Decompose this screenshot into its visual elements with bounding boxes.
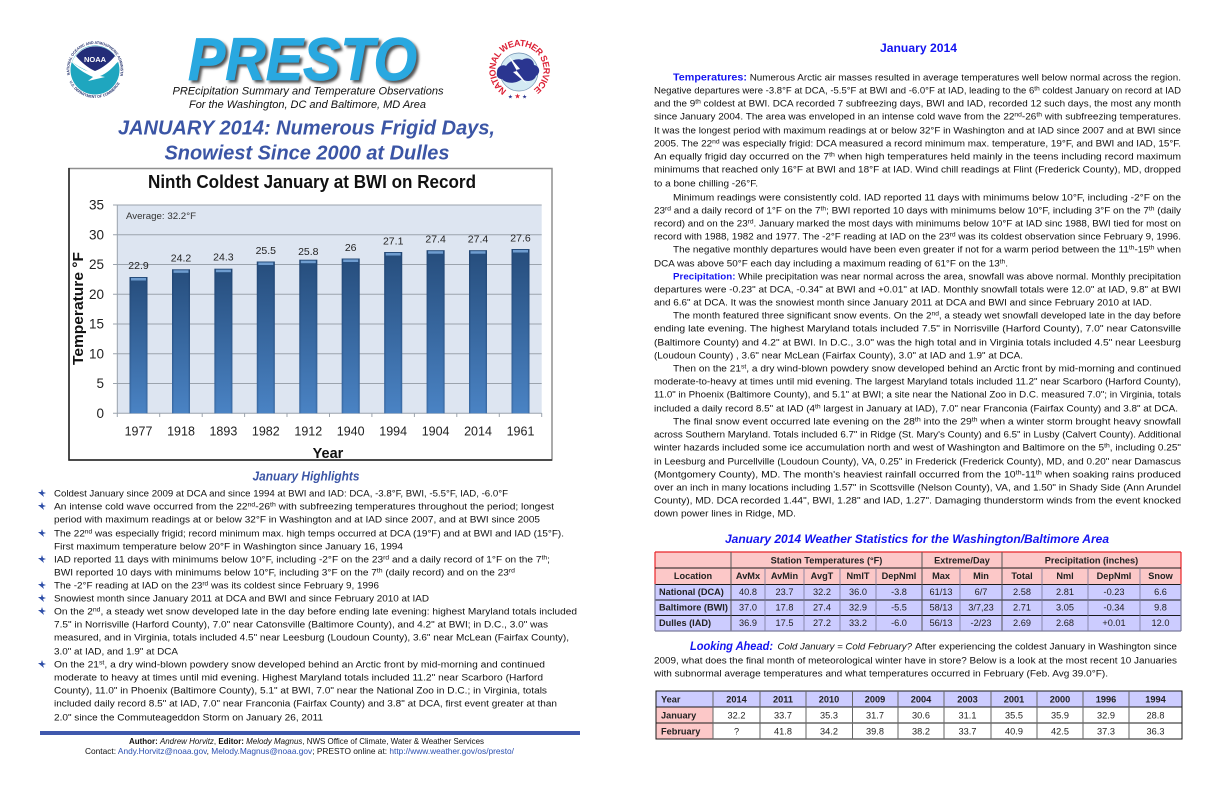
paragraph: temperatures: -15: [1135, 244, 1149, 256]
average annotation: Average: 32.2°F: [126, 211, 196, 222]
table row: National (DCA): National (DCA): [659, 587, 724, 597]
x axis year labels: 1961: [507, 424, 534, 438]
paragraph: temperatures: DCA was above 50°F each day including a maximum reading of 61°F on the 13: [654, 258, 991, 270]
heading: main headline: JANUARY 2014: Numerous Frigid Days,: [118, 118, 495, 140]
heading: main headline: Snowiest Since 2000 at Dulles: [164, 142, 450, 164]
subtitle: PRESTO full name and area: PREcipitation Summary and Temperature Observations: [172, 86, 444, 98]
y axis tick labels: 15: [89, 316, 104, 332]
y axis tick labels: 20: [89, 287, 104, 302]
table row: Dulles (IAD): 2.69: [1013, 618, 1031, 628]
highlight: cold wave: An intense cold wave occurred from the 22: [54, 502, 236, 512]
paragraph: temperatures: rd: [950, 232, 956, 238]
heading: January 2014: January 2014: [880, 41, 957, 55]
paragraph: temperatures: with subfreezing temperatures.: [1042, 112, 1181, 122]
highlight: snow on the 2nd: , a steady wet snow developed late in the day before ending late evening: highest Maryland totals included: [100, 606, 577, 618]
paragraph: precipitation: th: [1016, 470, 1022, 476]
highlight: snow on the 21st: included daily record 8.5" at IAD, 7.0" near Franconia (Fairfax County) and 3.8" at DCA, first event greater at than: [54, 698, 557, 710]
table row: Dulles (IAD): 33.2: [849, 618, 867, 628]
paragraph: temperatures: (daily: [1155, 206, 1181, 216]
footer: author and contact credits: Contact: Andy.Horvitz@noaa.gov, Melody.Magnus@noaa.gov; PRESTO online at: http://www.weather.gov/os/presto/: [85, 746, 515, 756]
table row: Baltimore (BWI): 32.9: [849, 602, 867, 612]
table group headers: Station Temperatures (°F): [771, 556, 882, 566]
paragraph: precipitation: [653, 272, 1181, 520]
highlight: cold wave: [38, 502, 554, 526]
paragraph: temperatures: and the 9: [654, 98, 694, 110]
icon: NOAA logo: [66, 41, 124, 98]
y axis tick labels: 10: [89, 346, 104, 362]
text block: Looking Ahead: 2009, what does the final month of meteorological winter have in store? Below is a look at the most recent 10 Januaries: [654, 656, 1177, 666]
highlight: the 22nd: was especially frigid; record minimum max. high temps occurred at DCA (19°F) and at BWI and IAD (15°F).: [92, 528, 564, 540]
table row: years: 2004: [911, 694, 932, 704]
table row: Baltimore (BWI): [659, 602, 1167, 612]
table row: January: 32.2: [728, 710, 745, 720]
table row: years: 2001: [1004, 694, 1024, 704]
table column headers: Nml: [1056, 571, 1074, 581]
table group headers: Precipitation (inches): [1045, 556, 1138, 566]
highlight: the 22nd: [38, 528, 564, 552]
paragraph: temperatures: 23: [654, 206, 665, 216]
paragraph: temperatures: th: [829, 152, 835, 158]
table row: National (DCA): 32.2: [813, 587, 831, 597]
table row: years: 1996: [1096, 694, 1116, 704]
table column headers: Snow: [1148, 571, 1174, 581]
table row: Dulles (IAD): -6.0: [891, 618, 907, 628]
highlight: minimums: ;: [547, 554, 550, 566]
paragraph: precipitation: largest in January at IAD), 7.0" near Franconia (Fairfax County) and 3.8" at DCA.: [821, 404, 1178, 414]
text block: Looking Ahead: [653, 639, 1177, 680]
x axis year labels: 1994: [379, 424, 407, 438]
paragraph: precipitation: th: [1104, 442, 1110, 450]
paragraph: temperatures: when: [1154, 244, 1181, 256]
table row: National (DCA): 6/7: [975, 587, 987, 597]
y axis tick labels: [89, 198, 104, 421]
data labels: 25.5: [256, 245, 276, 257]
highlight: minimums: th: [541, 554, 548, 562]
table row: February: 40.9: [1005, 726, 1023, 736]
data labels: 24.3: [213, 252, 234, 264]
table: January and February temperatures by year: [656, 691, 1182, 739]
table row: years: [661, 694, 1167, 704]
paragraph: precipitation: , a dry wind-blown powdery snow developed behind an Arctic front by mid-morning and continued: [746, 364, 1181, 374]
paragraph: precipitation: 11.0" in Phoenix (Baltimore County), and 5.1" at BWI; a site near the National Zoo in D.C. measured 7.0"; in Virginia, totals: [654, 390, 1181, 400]
table row: February: 38.2: [912, 726, 930, 736]
paragraph: temperatures: th: [1129, 244, 1135, 252]
table row: January: 33.7: [774, 710, 792, 720]
subtitle: PRESTO full name and area: For the Washington, DC and Baltimore, MD Area: [189, 99, 426, 111]
footer: author and contact credits: Author: Andrew Horvitz, Editor: Melody Magnus, NWS Office of Climate, Water & Weather Services: [129, 736, 484, 746]
paragraph: temperatures: when high temperatures held mainly in the teens including record maximum: [835, 152, 1181, 162]
table row: years: 2000: [1050, 694, 1070, 704]
table row: January: 35.5: [1005, 710, 1023, 720]
paragraph: temperatures: and a daily record of 1°F on the 7: [671, 206, 821, 216]
paragraph: precipitation: into the 29: [921, 416, 972, 428]
heading: January Highlights: January Highlights: [252, 470, 360, 484]
table group headers: Extreme/Day: [934, 556, 991, 566]
table row: National (DCA): 2.81: [1056, 587, 1074, 597]
highlight: snow on the 21st: moderate to heavy at times until mid evening. Highest Maryland totals included 11.2" near Scarboro (Harford: [54, 672, 543, 684]
chart title: Ninth Coldest January at BWI on Record: [148, 172, 476, 192]
table row: February: 33.7: [959, 726, 976, 736]
paragraph: precipitation: ending late evening. The highest Maryland totals included 7.5" in Norrisville (Harford County), 7.0" near Catonsville: [654, 324, 1181, 334]
paragraph: temperatures: record with 1988, 1982 and 1977. The -2°F reading at IAD on the 23: [654, 232, 944, 242]
paragraph: temperatures: minimums that reached only 16°F at BWI and 18°F at IAD. Wind chill readings at Flint (Frederick County), MD, dropped: [654, 164, 1181, 176]
data labels: [128, 232, 531, 272]
table row: Dulles (IAD): +0.01: [1102, 618, 1126, 628]
table column headers: Max: [932, 571, 951, 581]
paragraph: precipitation: winter hazards included some ice accumulation north and west of Washington and Baltimore on the 5: [654, 442, 1083, 454]
paragraph: temperatures: .: [1005, 258, 1008, 270]
table row: Baltimore (BWI): 27.4: [813, 602, 831, 612]
table row: February: 42.5: [1051, 726, 1069, 736]
data labels: 27.4: [425, 233, 446, 245]
paragraph: temperatures: rd: [748, 218, 754, 226]
paragraph: temperatures: rd: [665, 206, 671, 212]
paragraph: precipitation: moderate-to-heavy at times until mid evening. The largest Maryland totals included 11.2" near Scarboro (Harford County),: [654, 376, 1181, 388]
paragraph: temperatures: th: [1036, 112, 1042, 118]
paragraph: temperatures: th: [1149, 244, 1155, 252]
paragraph: temperatures: since January 2004. The area was enveloped in an intense cold wave from the 22: [654, 112, 1001, 122]
paragraph: precipitation: Precipitation: While precipitation was near normal across the area, snowfall was above normal. Monthly precipitation: [673, 272, 1181, 282]
x axis year labels: 1904: [422, 424, 450, 438]
x axis year labels: 2014: [464, 424, 492, 438]
highlight: coldest January: Coldest January since 2009 at DCA and since 1994 at BWI and IAD: DCA, -3.8°F, BWI, -5.5°F, IAD, -6.0°F: [54, 488, 508, 500]
paragraph: precipitation: The month featured three significant snow events. On the 2: [673, 310, 925, 322]
paragraph: precipitation: County), MD. DCA recorded 1.44", BWI, 1.28" and IAD, 1.27". Damaging thunderstorm winds from the event knocked: [654, 496, 1181, 506]
highlight: snow on the 21st: County), 11.0" in Phoenix (Baltimore County), 5.1" at BWI, 7.0" near the National Zoo in D.C.; in Virginia, totals: [54, 686, 547, 696]
highlight: minimums: [38, 554, 550, 578]
table row: years: 1994: [1145, 694, 1167, 704]
highlight: snow on the 21st: On the 21: [54, 660, 96, 670]
paragraph: precipitation: and 6.6" at DCA. It was the snowiest month since January 2011 at DCA and BWI and since February 2010 at IAD.: [654, 298, 1152, 308]
table: weather statistics: [655, 552, 1181, 631]
table row: years: 2010: [819, 694, 839, 704]
table row: National (DCA): -3.8: [891, 587, 907, 597]
y axis tick labels: 30: [89, 228, 104, 242]
paragraph: precipitation: when soaking rains produced: [1042, 470, 1181, 480]
table row: Dulles (IAD): Dulles (IAD): [659, 618, 711, 628]
table row: February: 37.3: [1097, 726, 1115, 736]
paragraph: temperatures: coldest at BWI. DCA recorded 7 subfreezing days, BWI and IAD, recorded 12 such days, the most any month: [701, 98, 1181, 110]
highlight: minimums: rd: [383, 554, 390, 562]
highlight: snow on the 2nd: On the 2: [54, 606, 91, 618]
panel: highlights bullet list: [38, 488, 577, 724]
table row: February: 36.3: [1147, 726, 1164, 736]
table column headers: [674, 571, 1174, 581]
paragraph: temperatures: . January marked the most days with minimums below 10°F at IAD sinc 1988, BWI tied for most on: [754, 218, 1181, 230]
table column headers: NmlT: [847, 571, 870, 581]
table column headers: DepNml: [882, 571, 916, 581]
x axis year labels: 1977: [125, 424, 152, 438]
paragraph: precipitation: Then on the 21: [673, 364, 738, 374]
highlight: snow on the 21st: 2.0" since the Commuteageddon Storm on January 26, 2011: [54, 712, 323, 724]
paragraph: precipitation: th: [1036, 470, 1042, 476]
highlight: the 22nd: The 22: [54, 528, 84, 540]
table row: January: 32.9: [1097, 710, 1115, 720]
highlight: snow on the 2nd: measured, and in Virginia, totals included 4.5" near Leesburg (Loudoun County), 3.6" near McLean (Fairfax County),: [54, 632, 569, 644]
table row: February: 41.8: [774, 726, 792, 736]
highlight: snow on the 2nd: 3.0" at IAD, and 1.9" at DCA: [54, 646, 179, 658]
bars: [130, 249, 530, 413]
paragraph: temperatures: th: [695, 98, 701, 106]
table row: February: ?: [734, 726, 739, 736]
table row: years: 2011: [773, 694, 793, 704]
paragraph: temperatures: coldest January on record at IAD: [1040, 86, 1181, 96]
paragraph: temperatures: -26: [1022, 112, 1036, 122]
paragraph: temperatures: It was the longest period with maximum readings at or below 32°F in Washington and at IAD since 2007 and at BWI since: [654, 126, 1181, 136]
paragraph: precipitation: , a steady wet snowfall developed late in the day before: [939, 310, 1181, 322]
table row: February: 34.2: [820, 726, 838, 736]
data labels: 26: [345, 242, 357, 254]
table row: Dulles (IAD): 27.2: [813, 618, 831, 628]
table group headers: [771, 556, 1138, 566]
paragraph: temperatures: th: [1034, 86, 1040, 92]
paragraph: temperatures: Temperatures: Numerous Arctic air masses resulted in average temperatures well below normal across the region.: [673, 72, 1181, 84]
paragraph: temperatures: to a bone chilling -26°F.: [654, 178, 758, 190]
table row: January: 31.7: [866, 710, 884, 720]
paragraph: temperatures: record) and on the 23: [654, 218, 746, 230]
x axis year labels: 1982: [252, 424, 280, 438]
highlight: coldest since 1996: rd: [202, 580, 209, 588]
table row: January: [661, 710, 1164, 720]
table column headers: AvgT: [811, 571, 834, 581]
y axis tick labels: 0: [96, 406, 104, 421]
footer: author and contact credits: [85, 736, 515, 756]
data labels: 25.8: [298, 246, 319, 258]
x axis year labels: 1940: [337, 424, 365, 438]
table row: February: [661, 726, 1164, 736]
heading: main headline: [118, 118, 495, 164]
icon: NOAA logo: U.S. DEPARTMENT OF COMMERCE: [70, 80, 120, 98]
table row: National (DCA): -0.23: [1104, 587, 1124, 597]
table row: Baltimore (BWI): 58/13: [930, 602, 952, 612]
icon: National Weather Service logo: ★ ★ ★: [508, 92, 527, 100]
data labels: 27.1: [383, 236, 404, 248]
highlight: coldest since 1996: was its coldest since February 9, 1996: [208, 580, 379, 592]
paragraph: temperatures: was especially frigid: DCA measured a record minimum max. temperature, 19°F, and BWI and IAD, 15°F.: [720, 138, 1181, 150]
table row: years: 2009: [865, 694, 885, 704]
title: PRESTO wordmark: PRESTO: [190, 28, 420, 96]
table column headers: DepNml: [1097, 571, 1131, 581]
x axis year labels: 1893: [209, 424, 237, 438]
paragraph: precipitation: (Baltimore County) and 4.2" at BWI. In D.C., 3.0" was the high total and in Virginia totals included 4.5" near Leesburg: [654, 338, 1181, 348]
table row: January: January: [661, 710, 697, 720]
icon: NOAA logo: NOAA: [84, 55, 107, 64]
highlight: cold wave: period with maximum readings at or below 32°F in Washington and at IAD since 2007, and at BWI since 2005: [54, 514, 540, 526]
table row: Baltimore (BWI): -5.5: [891, 602, 907, 612]
table row: National (DCA): 40.8: [739, 587, 757, 597]
table row: National (DCA): [659, 587, 1167, 597]
title: PRESTO wordmark: PRESTO: [188, 26, 417, 93]
paragraph: precipitation: (Montgomery County), MD. The month's heaviest rainfall occurred from the 10: [654, 470, 985, 480]
paragraph: temperatures: Negative departures were -3.8°F at DCA, -5.5°F at BWI and -6.0°F at IAD, leading to the 6: [654, 86, 1037, 96]
highlight: minimums: th: [377, 568, 383, 574]
table row: Dulles (IAD): [659, 618, 1169, 628]
table row: Baltimore (BWI): 17.8: [776, 602, 793, 612]
paragraph: temperatures: Minimum readings were consistently cold. IAD reported 11 days with minimums below 10°F, including -2°F on the: [673, 192, 1181, 204]
table row: National (DCA): 36.0: [849, 587, 867, 597]
table row: years: Year: [661, 694, 681, 704]
table row: Baltimore (BWI): 2.71: [1013, 602, 1031, 612]
text block: Looking Ahead: After experiencing the coldest January in Washington since: [915, 642, 1177, 652]
paragraph: temperatures: The negative monthly departures would have been even greater if not for a warm period between the 11: [673, 244, 1113, 256]
paragraph: temperatures: was its coldest observation since February 9, 1996.: [956, 232, 1181, 242]
icon: National Weather Service logo: NATIONAL WEATHER SERVICE: [489, 40, 550, 95]
paragraph: precipitation: th: [815, 404, 821, 410]
x axis year labels: [125, 424, 534, 438]
table row: National (DCA): 6.6: [1154, 587, 1167, 597]
table row: February: 39.8: [866, 726, 884, 736]
table column headers: Min: [973, 571, 989, 581]
paragraph: precipitation: included a daily record 8.5" at IAD (4: [654, 404, 810, 414]
y axis title: Temperature °F: [70, 252, 87, 365]
highlight: snow on the 21st: [38, 660, 557, 724]
paragraph: temperatures: nd: [712, 138, 720, 146]
highlight: snow on the 2nd: 7.5" in Norrisville (Harford County), 7.0" near Catonsville (Baltimore County), and 4.2" at BWI; in D.C., 3.0" was: [54, 620, 548, 630]
y axis tick labels: 25: [89, 257, 104, 272]
y axis tick labels: 5: [96, 376, 104, 391]
paragraph: temperatures: th: [1000, 258, 1006, 266]
paragraph: temperatures: ; BWI reported 10 days with minimums below 10°F, including 3°F on the 7: [826, 206, 1149, 216]
table column headers: Total: [1011, 571, 1033, 581]
highlight: snowiest month: Snowiest month since January 2011 at DCA and BWI and since February 2010 at IAD: [54, 594, 429, 604]
highlight: minimums: IAD reported 11 days with minimums below 10°F, including -2°F on the 23: [54, 554, 367, 566]
highlight: the 22nd: nd: [85, 528, 93, 536]
highlight: snow on the 21st: , a dry wind-blown powdery snow developed behind an Arctic front by mid-morning and continued: [104, 660, 545, 670]
table column headers: Location: [674, 571, 713, 581]
data labels: 27.6: [510, 232, 531, 244]
header: logos and PRESTO title: [66, 26, 550, 100]
table row: Dulles (IAD): 36.9: [739, 618, 757, 628]
highlight: the 22nd: First maximum temperature below 20°F in Washington since January 16, 1994: [54, 542, 404, 552]
table column headers: AvMin: [771, 571, 798, 581]
paragraph: temperatures: 2005. The 22: [654, 138, 710, 150]
paragraph: temperatures: An equally frigid day occurred on the 7: [654, 152, 818, 162]
table row: January: 35.9: [1051, 710, 1069, 720]
highlight: cold wave: nd: [248, 502, 256, 508]
paragraph: temperatures: nd: [1014, 112, 1022, 118]
text block: Looking Ahead: Cold January = Cold February?: [778, 642, 913, 652]
paragraph: precipitation: The final snow event occurred late evening on the 28: [673, 416, 898, 428]
table row: Baltimore (BWI): 9.8: [1154, 602, 1167, 612]
table row: Dulles (IAD): -2/23: [971, 618, 991, 628]
paragraph: precipitation: across Southern Maryland. Totals included 6.7" in Ridge (St. Mary's County) and 6.5" in Lusby (Calvert County). Additional: [654, 430, 1181, 440]
x axis year labels: 1918: [167, 424, 195, 438]
paragraph: temperatures: [654, 72, 1181, 270]
table row: Baltimore (BWI): 3/7,23: [968, 602, 994, 612]
highlight: minimums: BWI reported 10 days with minimums below 10°F, including 3°F on the 7: [54, 568, 361, 578]
heading: weather statistics table title: January 2014 Weather Statistics for the Washington/Baltimore Area: [725, 532, 1109, 546]
highlight: cold wave: th: [270, 502, 276, 508]
highlight: minimums: rd: [509, 568, 515, 574]
data labels: 22.9: [128, 260, 149, 272]
footer rule: [40, 731, 580, 735]
highlight: coldest since 1996: [38, 580, 379, 592]
paragraph: precipitation: st: [741, 364, 747, 370]
table row: January: 28.8: [1147, 710, 1164, 720]
table column headers: AvMx: [736, 571, 761, 581]
paragraph: precipitation: th: [972, 416, 978, 424]
x axis year labels: 1912: [294, 424, 322, 438]
table row: January: 30.6: [912, 710, 930, 720]
table row: February: February: [661, 726, 701, 736]
highlight: minimums: (daily record) and on the 23: [383, 568, 509, 578]
paragraph: precipitation: -11: [1022, 470, 1036, 480]
table row: National (DCA): 61/13: [930, 587, 952, 597]
table row: Baltimore (BWI): Baltimore (BWI): [659, 602, 728, 612]
paragraph: temperatures: th: [821, 206, 827, 212]
paragraph: precipitation: over an inch in many locations including 1.57" in Scottsville (Nelson County), VA, and 1.50" in Shady Side (Ann Arundel: [654, 482, 1181, 494]
data labels: 27.4: [468, 233, 488, 245]
table row: years: 2014: [726, 694, 748, 704]
bar chart: Ninth Coldest January at BWI on Record: [69, 168, 552, 462]
table row: Dulles (IAD): 17.5: [776, 618, 793, 628]
paragraph: precipitation: (Loudoun County) , 3.6" near McLean (Fairfax County), 3.0" at IAD and 1.9" at DCA.: [654, 350, 1023, 362]
highlight: cold wave: -26: [255, 502, 270, 512]
table row: Baltimore (BWI): 37.0: [739, 602, 757, 612]
paragraph: precipitation: th: [915, 416, 921, 424]
highlight: coldest since 1996: The -2°F reading at IAD on the 23: [54, 580, 198, 592]
highlight: snow on the 2nd: nd: [93, 606, 101, 614]
x axis title: Year: [313, 446, 344, 462]
paragraph: precipitation: when a winter storm brought heavy snowfall: [978, 416, 1181, 428]
subtitle: PRESTO full name and area: [172, 86, 444, 111]
table row: National (DCA): 2.58: [1013, 587, 1031, 597]
highlight: snow on the 2nd: [38, 606, 577, 658]
table row: Dulles (IAD): 12.0: [1152, 618, 1169, 628]
text block: Looking Ahead: with subnormal average temperatures and what temperatures occurred in February (Feb. Avg 39.0°F).: [653, 668, 1108, 680]
paragraph: precipitation: , including 0.25": [1110, 442, 1181, 454]
table row: National (DCA): 23.7: [776, 587, 793, 597]
table row: Baltimore (BWI): 3.05: [1056, 602, 1074, 612]
paragraph: precipitation: departures were -0.23" at DCA, -0.34" at BWI and +0.01" at IAD. Monthly snowfall totals were 12.0" at IAD, 9.8" at BWI: [654, 284, 1181, 296]
data labels: 24.2: [171, 253, 191, 265]
paragraph: precipitation: down power lines in Ridge, MD.: [654, 508, 796, 520]
table row: January: 35.3: [820, 710, 838, 720]
table row: January: 31.1: [959, 710, 976, 720]
table row: years: 2003: [957, 694, 978, 704]
table row: Dulles (IAD): 2.68: [1056, 618, 1074, 628]
highlight: cold wave: with subfreezing temperatures throughout the period; longest: [276, 502, 554, 512]
text block: Looking Ahead: Looking Ahead:: [690, 639, 773, 653]
highlight: snow on the 21st: st: [99, 660, 105, 666]
table row: Baltimore (BWI): -0.34: [1104, 602, 1124, 612]
highlight: minimums: and a daily record of 1°F on the 7: [389, 554, 541, 566]
table row: Dulles (IAD): 56/13: [930, 618, 952, 628]
paragraph: precipitation: in Leesburg and Purcellville (Loudoun County), VA, 0.25" in Frederick (Frederick County), MD, and 0.20" near Damascus: [654, 456, 1181, 468]
y axis tick labels: 35: [89, 198, 104, 212]
paragraph: precipitation: nd: [931, 310, 939, 318]
text block: monthly narrative: [653, 72, 1181, 520]
paragraph: temperatures: th: [1149, 206, 1155, 212]
